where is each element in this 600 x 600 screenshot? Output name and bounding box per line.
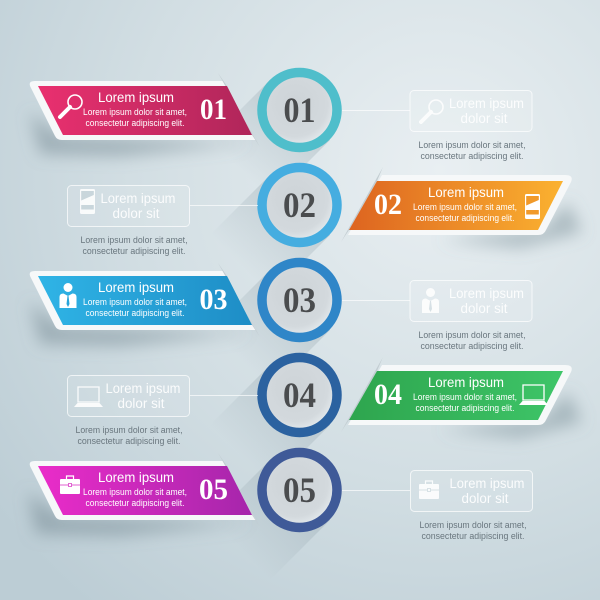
banner white backing (348, 365, 572, 425)
banner fold (218, 263, 260, 337)
banner text: Lorem ipsum dolor sit amet, (83, 107, 187, 117)
callout description line 2: consectetur adipiscing elit. (420, 341, 524, 351)
callout description line 2: consectetur adipiscing elit. (82, 246, 186, 256)
panel: banner 03 (30, 263, 260, 346)
circle 03 (262, 262, 337, 338)
banner fold (341, 357, 383, 432)
banner text: Lorem ipsum dolor sit amet, (83, 487, 187, 497)
callout heading line 2: dolor sit (462, 491, 509, 506)
banner shadow (440, 392, 582, 438)
banner number: 05 (199, 473, 228, 506)
icon: laptop outline (74, 387, 103, 407)
long shadow: circle 1 (210, 80, 330, 200)
banner number: 03 (200, 283, 228, 316)
banner number: 01 (200, 93, 227, 126)
banner heading: Lorem ipsum (98, 90, 174, 105)
banner fold (218, 73, 260, 147)
circle number: 04 (283, 375, 316, 415)
circle number: 05 (283, 470, 316, 510)
panel: banner 05 (28, 453, 260, 536)
callout description: Lorem ipsum dolor sit amet, (76, 425, 182, 435)
callout heading line 2: dolor sit (460, 301, 508, 316)
icon: briefcase (60, 476, 80, 494)
banner text line 2: consectetur adipiscing elit. (86, 118, 184, 128)
circle number: 03 (283, 280, 316, 320)
banner shadow (30, 112, 250, 156)
callout: left 04 (68, 376, 258, 446)
callout description: Lorem ipsum dolor sit amet, (80, 235, 188, 245)
banner heading: Lorem ipsum (428, 375, 504, 390)
long shadow: circle 2 (210, 175, 330, 295)
long shadow: circle 5 (210, 460, 330, 580)
callout heading line 2: dolor sit (112, 206, 160, 221)
banner colour strip (38, 276, 252, 325)
callout heading: Lorem ipsum (449, 286, 524, 301)
banner white backing (30, 271, 256, 330)
callout description line 2: consectetur adipiscing elit. (422, 531, 524, 541)
circle 01 (262, 72, 337, 148)
banner white backing (30, 81, 256, 140)
callout heading line 2: dolor sit (118, 396, 165, 411)
callout heading line 2: dolor sit (460, 111, 508, 126)
long shadow: circle 4 (210, 365, 330, 485)
banner fold (341, 167, 383, 242)
callout: left 02 (68, 186, 258, 256)
panel: banner 02 (341, 167, 582, 248)
banner shadow (28, 492, 250, 536)
callout heading: Lorem ipsum (450, 476, 524, 491)
circle 04 (262, 358, 337, 432)
banner text line 2: consectetur adipiscing elit. (86, 308, 184, 318)
long shadow: circle 3 (210, 270, 330, 390)
banner text: Lorem ipsum dolor sit amet, (413, 392, 517, 402)
banner colour strip (38, 86, 252, 135)
banner number: 02 (374, 188, 402, 221)
banner colour strip (349, 371, 563, 420)
banner text line 2: consectetur adipiscing elit. (86, 498, 184, 508)
circle 05 (262, 452, 337, 528)
callout: right 03 (342, 280, 532, 351)
callout: right 05 (342, 470, 532, 541)
icon: magnifier outline (421, 100, 443, 122)
banner shadow (440, 202, 582, 248)
icon: person outline (422, 288, 439, 313)
banner white backing (348, 175, 572, 235)
banner shadow (30, 302, 250, 346)
callout description line 2: consectetur adipiscing elit. (78, 436, 180, 446)
icon: laptop (519, 385, 548, 405)
callout heading: Lorem ipsum (100, 191, 176, 206)
banner text: Lorem ipsum dolor sit amet, (83, 297, 187, 307)
icon: briefcase outline (419, 481, 439, 499)
callout description: Lorem ipsum dolor sit amet, (420, 520, 526, 530)
panel: banner 01 (30, 73, 260, 156)
banner heading: Lorem ipsum (98, 280, 174, 295)
callout heading: Lorem ipsum (106, 381, 180, 396)
callout description line 2: consectetur adipiscing elit. (420, 151, 524, 161)
banner text: Lorem ipsum dolor sit amet, (413, 202, 517, 212)
panel: banner 04 (341, 357, 582, 438)
banner text line 2: consectetur adipiscing elit. (416, 213, 514, 223)
banner colour strip (349, 181, 563, 230)
circle number: 02 (283, 185, 316, 225)
callout heading: Lorem ipsum (449, 96, 524, 111)
banner number: 04 (374, 378, 402, 411)
banner white backing (30, 461, 256, 520)
callout description: Lorem ipsum dolor sit amet, (418, 140, 526, 150)
banner text line 2: consectetur adipiscing elit. (416, 403, 514, 413)
banner heading: Lorem ipsum (98, 470, 174, 485)
banner fold (218, 453, 260, 527)
circle 02 (262, 168, 337, 242)
icon: phone outline (80, 189, 95, 214)
icon: person (60, 283, 76, 308)
banner colour strip (38, 466, 252, 515)
circle number: 01 (284, 90, 316, 130)
callout: right 01 (342, 90, 532, 161)
icon: magnifier (60, 95, 82, 117)
callout description: Lorem ipsum dolor sit amet, (418, 330, 526, 340)
icon: phone (525, 194, 540, 219)
banner heading: Lorem ipsum (428, 185, 504, 200)
